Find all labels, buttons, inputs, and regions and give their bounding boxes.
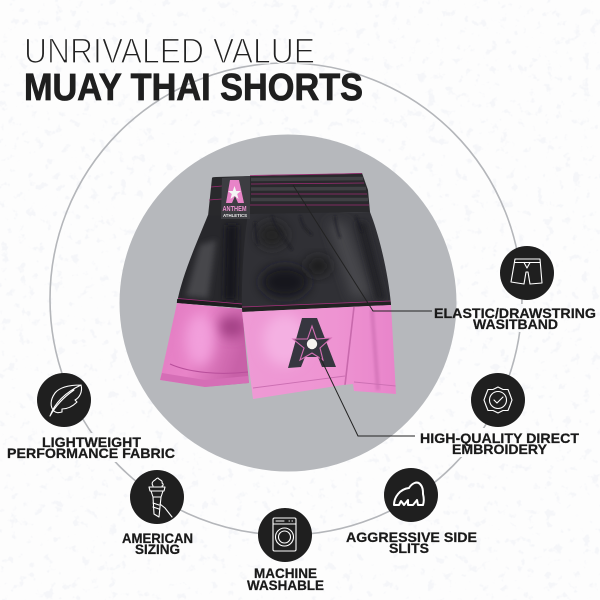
feature: lightweight fabric	[7, 373, 175, 461]
label: american sizing: AMERICAN	[122, 530, 193, 546]
label: direct embroidery: HIGH-QUALITY DIRECT	[420, 430, 579, 446]
feature: american sizing	[122, 470, 193, 557]
icon: liberty torch	[130, 470, 184, 524]
waistband logo patch	[221, 176, 250, 219]
label: aggressive side slits: AGGRESSIVE SIDE	[346, 529, 477, 545]
label: elastic drawstring waistband	[434, 305, 596, 332]
black front panel	[177, 212, 391, 312]
label: direct embroidery: EMBROIDERY	[452, 441, 548, 457]
title	[24, 32, 363, 109]
gray center circle	[120, 134, 456, 472]
leader line: waistband	[293, 185, 432, 311]
label: direct embroidery	[420, 430, 579, 457]
outer ring	[50, 63, 522, 535]
patch brand text: ANTHEM	[222, 204, 246, 213]
waistband logo patch: ATHLETICS	[223, 213, 247, 218]
label: machine washable	[247, 565, 324, 593]
label: aggressive side slits	[346, 529, 477, 556]
shorts product image	[160, 173, 396, 399]
icon: feather	[37, 373, 91, 427]
patch letter A	[226, 180, 244, 203]
icon: washing machine	[258, 508, 312, 562]
label: american sizing	[122, 530, 193, 557]
label: elastic drawstring waistband: ELASTIC/DRAWSTRING	[434, 305, 596, 321]
hem stitching	[242, 304, 391, 310]
title line: muay thai shorts: MUAY THAI SHORTS	[24, 67, 363, 109]
icon: badge check	[471, 373, 525, 427]
black back panel	[177, 214, 248, 308]
icon: shorts	[500, 246, 554, 300]
label: lightweight performance fabric: PERFORMANCE FABRIC	[7, 445, 175, 461]
label: lightweight performance fabric	[7, 434, 175, 461]
feature: waistband	[434, 246, 596, 332]
feature: side slits	[346, 468, 477, 556]
label: machine washable: WASHABLE	[247, 577, 324, 593]
label: aggressive side slits: SLITS	[389, 540, 429, 556]
patch star	[228, 186, 241, 199]
embroidered star logo	[288, 318, 336, 368]
label: machine washable: MACHINE	[254, 565, 317, 581]
feature: machine washable	[247, 508, 324, 593]
pink back panel	[160, 303, 249, 387]
waistband	[208, 173, 370, 216]
feature: embroidery	[420, 373, 579, 457]
leader line: embroidery	[320, 357, 415, 436]
label: american sizing: SIZING	[135, 541, 180, 557]
icon: gorilla	[384, 468, 438, 522]
pink front panel	[242, 305, 396, 399]
title line: unrivaled value: UNRIVALED VALUE	[24, 32, 315, 71]
label: lightweight performance fabric: LIGHTWEIGHT	[42, 434, 141, 450]
logo center dot	[307, 339, 317, 349]
label: elastic drawstring waistband: WASITBAND	[473, 316, 558, 332]
